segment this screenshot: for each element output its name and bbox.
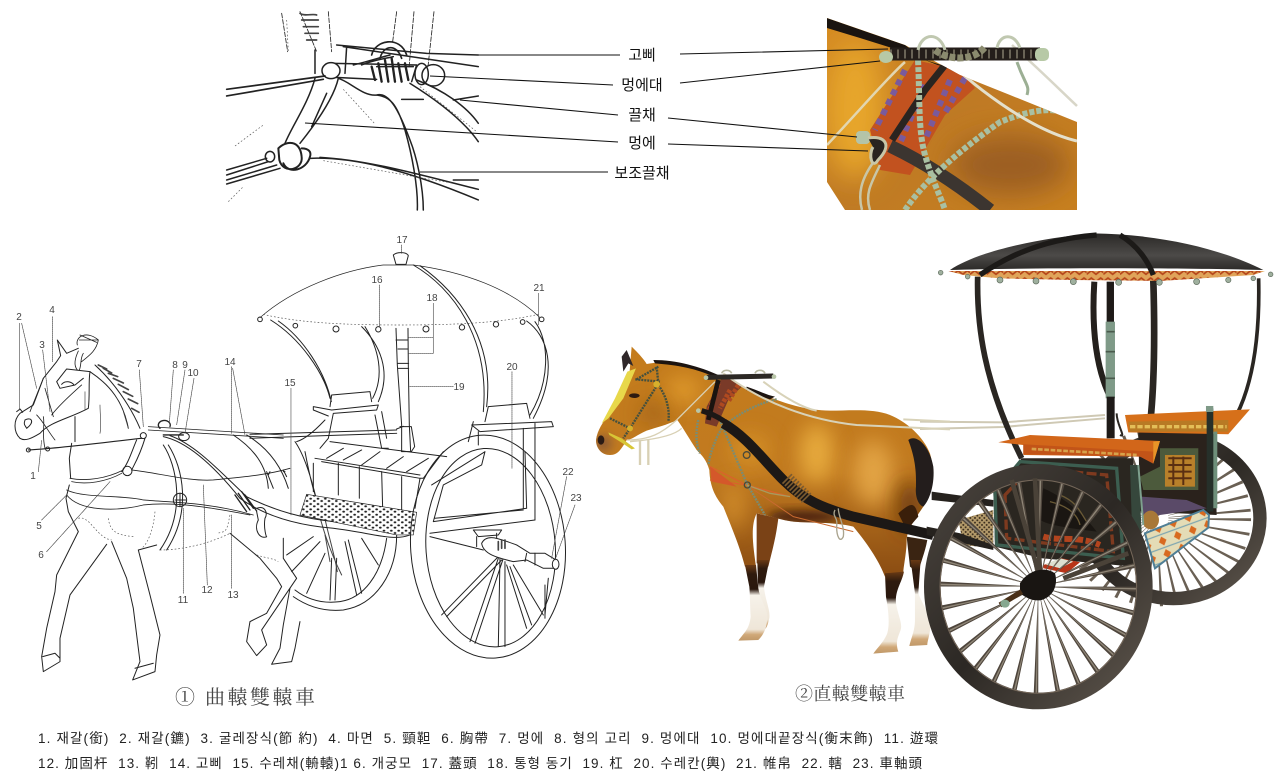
near legs [738,565,767,641]
white gap under yoke [985,60,1040,103]
caption: curved-shaft chariot: ① 曲轅雙轅車 [175,686,315,709]
part numbers: 16 [371,275,383,286]
callout labels: 멍에대 [621,77,663,94]
part numbers: 1 [30,471,36,482]
front seat [998,435,1160,464]
rear panel [1138,432,1217,515]
part numbers: 20 [506,362,518,373]
part numbers: 2 [16,312,22,323]
callout labels: 멍에 [628,135,656,152]
line-drawn rear wheel [287,535,397,610]
line-drawn rear seat [468,403,553,520]
red tray [1043,558,1080,573]
part numbers [16,235,582,606]
red wrapped saddle pad [870,60,975,175]
leader lines [305,49,888,172]
pale back reins [723,373,950,429]
part numbers: 9 [182,360,188,371]
part numbers: 5 [36,521,42,532]
painted pale reins [920,415,1105,429]
body [596,347,933,577]
part numbers: 7 [136,359,142,370]
yoke bar [890,48,1040,60]
harness straps [148,427,283,438]
panel: line-drawn chariot [15,235,582,680]
textile shaft cover [958,510,993,548]
part numbers: 14 [224,357,236,368]
line-drawn front wheel [403,430,573,663]
part numbers: 12 [201,585,213,596]
yoke bar [707,376,773,377]
part numbers: 10 [187,368,199,379]
part numbers: 15 [284,378,296,389]
painted canopy [938,233,1273,285]
painted carriage body [927,406,1250,573]
callout labels [614,47,670,182]
painted front wheel [932,472,1144,701]
mane [827,18,954,72]
part numbers: 17 [396,235,408,246]
black shaft [723,423,933,535]
mane [653,360,775,399]
painted rear wheel [1087,438,1260,599]
part numbers: 11 [178,595,189,606]
tail [908,438,934,507]
part numbers: 13 [227,590,239,601]
black shaft [890,146,990,210]
part numbers: 6 [38,550,44,561]
line-drawn carriage box [250,392,553,575]
pale reins [827,62,905,145]
line-drawn central pole [396,328,415,452]
panel: line-drawn yoke detail [227,12,478,210]
part numbers: 8 [172,360,178,371]
green corded straps [905,60,1062,210]
painted horse [595,347,950,654]
part numbers: 4 [49,305,55,316]
legend list: 12. 加固杆 13. 靷 14. 고삐 15. 수레채(輈轅)1 6. 개궁모 17. 蓋頭 18. 통형 동기 19. 杠 20. 수레칸(輿) 21. 帷帛 22. 轄 23. 車軸頭 [38,755,922,771]
pole and strap [228,13,478,210]
front box [993,458,1133,567]
callout labels: 고삐 [628,47,656,64]
lower ring knot [856,131,870,144]
part numbers: 18 [426,293,438,304]
yoke bar and rings [227,12,478,96]
caption: straight-shaft chariot: ②直轅雙轅車 [795,684,905,704]
pink chest strap and orange traces [710,467,790,497]
bridle [610,367,669,438]
neck pad [705,377,742,427]
forelock blaze [602,368,636,423]
lower ring and auxiliary shaft [227,143,478,200]
legend list [38,730,938,771]
part numbers: 22 [562,467,574,478]
canopy rosettes [938,270,1273,285]
line-drawn canopy [258,253,548,418]
far legs [757,513,778,567]
part numbers: 19 [453,382,465,393]
seat cushion [1142,497,1207,523]
rear seat [1125,409,1250,434]
callout labels: 보조끌채 [614,165,670,182]
part numbers: 23 [570,493,582,504]
panel: painted chariot [595,233,1273,701]
line-drawn horse [15,335,300,680]
callout labels: 끌채 [628,107,656,124]
bow straps [271,320,384,402]
painted canopy pole and straps [978,277,1259,458]
part numbers: 21 [533,283,545,294]
green corded traces [697,399,777,515]
legend list: 1. 재갈(銜) 2. 재갈(鑣) 3. 굴레장식(節 約) 4. 마면 5. 頸靼 6. 胸帶 7. 멍에 8. 형의 고리 9. 멍에대 10. 멍에대끝장식(衡末飾) 11. 遊環 [38,730,938,746]
line-drawn shaft [163,436,410,537]
part number leader lines [19,317,291,593]
part numbers: 3 [39,340,45,351]
panel: painted yoke detail [827,18,1078,210]
